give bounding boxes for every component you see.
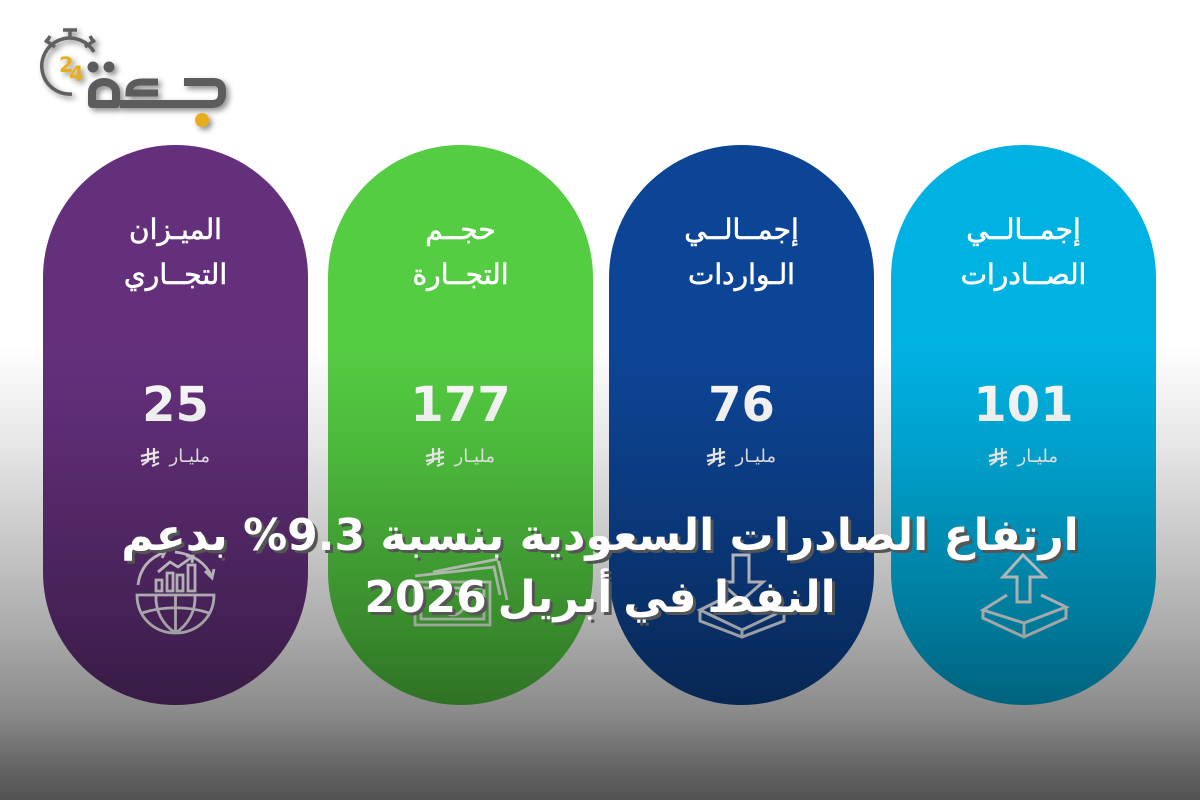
- heading: trade balance: الميـزان: [129, 213, 222, 246]
- heading: trade volume: [413, 213, 508, 292]
- heading: trade balance: التجــاري: [124, 258, 227, 291]
- icon: globe with rising chart: [136, 550, 216, 634]
- icon: arrow out of tray: [980, 553, 1070, 639]
- logo: Jeddah 24: 2: [59, 53, 74, 77]
- value: 101: 101: [973, 377, 1074, 433]
- heading: total imports: إجمــالــي: [684, 213, 799, 246]
- logo: Jeddah 24: [39, 27, 233, 134]
- unit: billion riyals: مليـار: [170, 446, 210, 467]
- unit: billion riyals: [426, 446, 495, 467]
- unit: billion riyals: مليـار: [455, 446, 495, 467]
- unit: billion riyals: مليـار: [1018, 446, 1058, 467]
- heading: trade volume: التجــارة: [413, 258, 508, 291]
- icon: arrow into tray: [696, 554, 786, 639]
- title: النفط في أبريل 2026: [364, 572, 836, 623]
- panel: trade balance: [43, 145, 308, 705]
- icon: banknotes: [414, 557, 508, 626]
- panel: total exports: [891, 145, 1156, 705]
- heading: trade balance: [124, 213, 227, 292]
- logo: Jeddah 24: 4: [69, 62, 84, 86]
- unit: billion riyals: [706, 446, 776, 467]
- value: 25: 25: [142, 377, 209, 433]
- heading: total exports: إجمــالــي: [966, 213, 1081, 246]
- unit: billion riyals: [988, 446, 1058, 467]
- panel: trade volume: [328, 145, 593, 705]
- heading: total exports: [961, 213, 1086, 292]
- value: 76: 76: [708, 377, 775, 433]
- title: [121, 510, 1079, 626]
- title: ارتفاع الصادرات السعودية بنسبة 9.3% بدعم: [121, 510, 1079, 561]
- heading: trade volume: حجــم: [425, 213, 496, 246]
- heading: total imports: [684, 213, 799, 292]
- panel: total imports: [609, 145, 874, 705]
- heading: total imports: الـواردات: [688, 258, 795, 291]
- unit: billion riyals: [140, 446, 210, 467]
- unit: billion riyals: مليـار: [736, 446, 776, 467]
- heading: total exports: الصــادرات: [961, 258, 1086, 291]
- value: 177: 177: [410, 377, 511, 433]
